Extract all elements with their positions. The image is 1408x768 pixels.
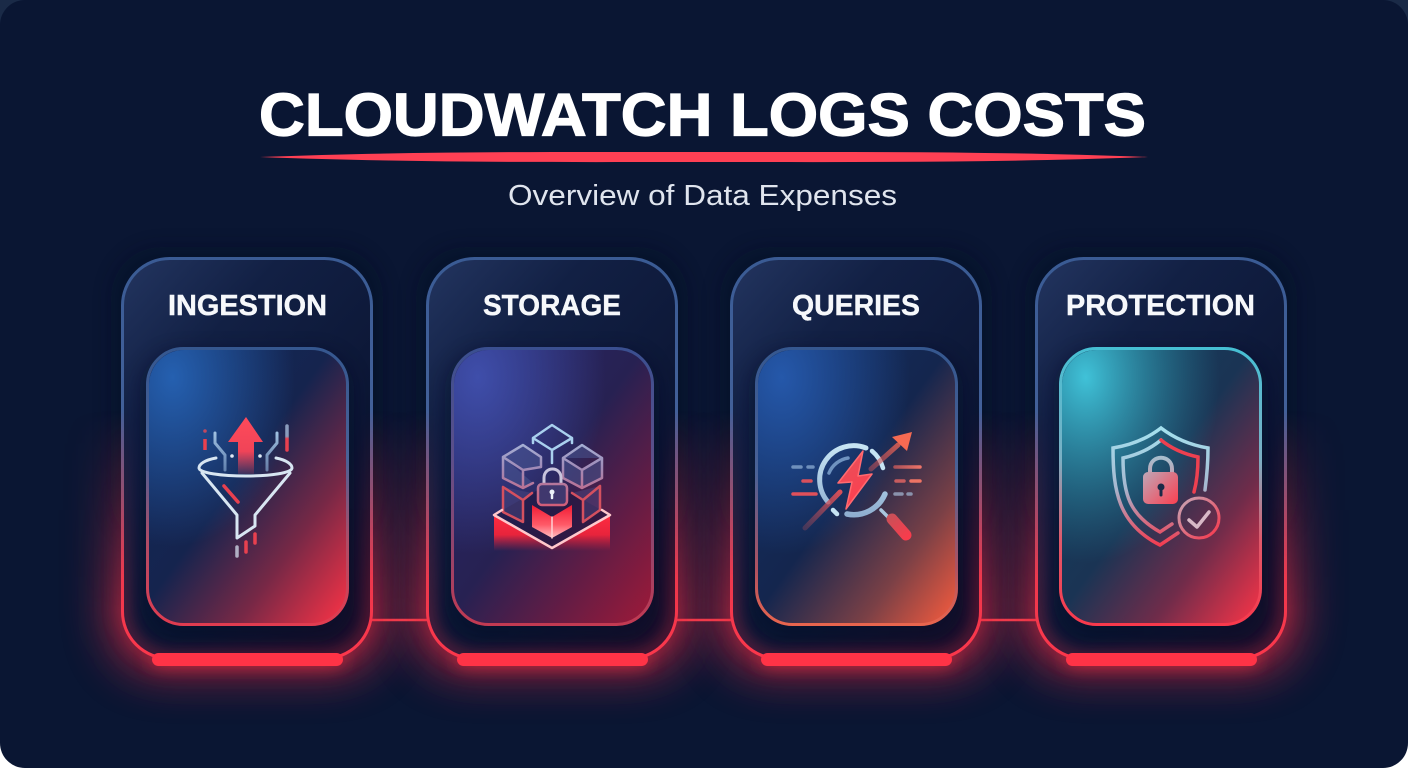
bottom bar: protection: [1066, 653, 1257, 666]
outer card: storage: [428, 258, 676, 658]
heading: storage: STORAGE: [483, 290, 621, 322]
inner tile: queries: [756, 348, 956, 624]
heading: ingestion: INGESTION: [168, 290, 327, 322]
halo and red glow: ingestion: [76, 432, 414, 707]
outer card: protection: [1036, 258, 1286, 658]
heading: protection: PROTECTION: [1066, 290, 1255, 322]
inner shadow: protection: [1036, 361, 1285, 656]
title: CLOUDWATCH LOGS COSTS: [259, 82, 1146, 148]
icon: funnel with up arrow: [199, 417, 292, 556]
panel: ingestion: [109, 247, 385, 674]
panel: protection: [1023, 247, 1299, 674]
bottom bar: storage: [457, 653, 648, 666]
heading: queries: QUERIES: [792, 290, 920, 322]
bottom bar: ingestion: [152, 653, 343, 666]
outer card: ingestion: [122, 258, 372, 658]
inner tile: ingestion: [148, 348, 348, 624]
outer card: queries: [732, 258, 980, 658]
bottom bar: queries: [761, 653, 952, 666]
icon: shield with lock and check: [1113, 428, 1219, 545]
inner tile: storage: [452, 348, 652, 624]
inner tile: protection: [1060, 348, 1260, 624]
halo and red glow: queries: [689, 432, 1024, 707]
panel: queries: [718, 247, 994, 674]
inner shadow: queries: [731, 360, 980, 656]
inner shadow: storage: [427, 360, 676, 656]
halo and red glow: storage: [384, 432, 719, 707]
title underline: [260, 152, 1148, 162]
halo and red glow: protection: [994, 432, 1332, 707]
panel: storage: [414, 247, 690, 674]
icon: cubes with lock: [494, 425, 610, 551]
connectors between cards: [372, 619, 1036, 621]
icon: magnifier with bolt and arrow: [793, 432, 920, 535]
inner shadow: ingestion: [122, 360, 371, 656]
subtitle: Overview of Data Expenses: [508, 180, 897, 212]
